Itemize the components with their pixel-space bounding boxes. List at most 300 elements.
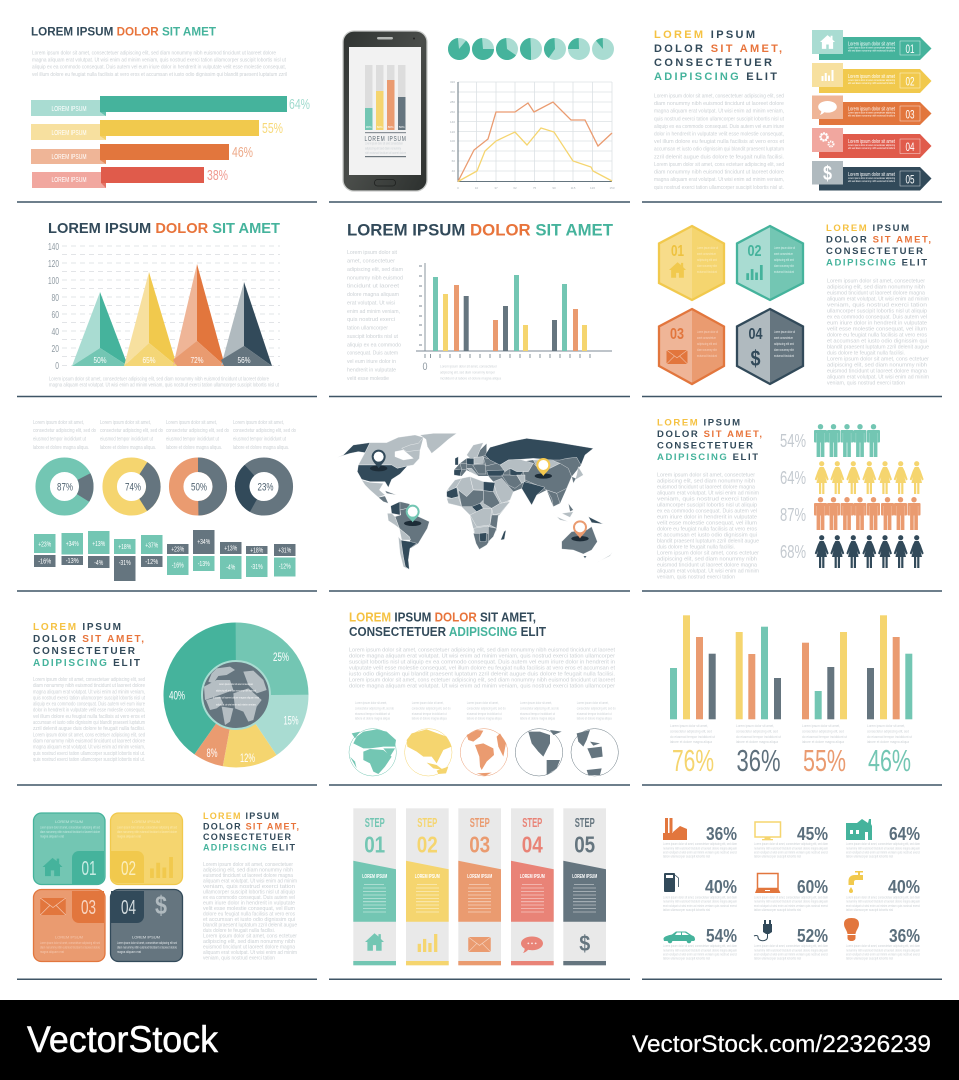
chart: donut 74%: 74%: [125, 482, 141, 494]
chart: delta boxes: -4%: [94, 560, 103, 567]
captions: bar groups: labore et dolore magna aliqua: [802, 740, 844, 744]
chart: line chart: [450, 80, 615, 190]
stat: tap: tation ullamcorper suscipit lobortis nisl: [846, 908, 893, 912]
chart caption: Lorem ipsum dolor sit amet, consectetuer: [440, 364, 498, 368]
bar: 38%: LOREM IPSUM: [52, 177, 87, 184]
panel: four bar groups: [670, 615, 912, 778]
text block: grouped bars: vel eum iriure dolor in: [347, 359, 396, 365]
text block: pie: dolor in hendrerit in vulputate velit esse molestie consequat,: [33, 708, 145, 714]
card 01: magna aliquam erat: [40, 834, 64, 838]
text block: four columns: labore et dolore magna aliqua.: [233, 445, 289, 451]
heading: arrow list: ADIPISCING ELIT: [654, 71, 777, 83]
text block: cards: veniam, quis nostrud exerci tation: [203, 884, 295, 890]
panel: icon statistics: [663, 818, 920, 961]
step 01: LOREM IPSUM: [362, 874, 387, 880]
text block: globes: suscipit lobortis nisl ut aliquip ex ea commodo consequat. Duis autem vel eum iriure dolor in hendrerit in: [349, 660, 615, 666]
hexagon 03: euismod tincidunt: [697, 354, 717, 358]
chart: line chart: 153: [609, 186, 615, 190]
arrow item 05: $: [823, 163, 832, 185]
card 04: [110, 890, 182, 962]
arrow item 05: Lorem ipsum dolor sit amet consectetuer adipiscing: [848, 176, 895, 180]
text block: four columns: labore et dolore magna aliqua.: [33, 445, 89, 451]
captions: globes: [355, 701, 616, 720]
text block: four columns: eiusmod tempor incididunt ut: [100, 436, 153, 442]
text block: cards: adipiscing elit, sed diam nonummy nibh: [203, 939, 295, 945]
card 04: $: [155, 890, 167, 920]
chart: delta boxes: -13%: [198, 561, 210, 568]
hexagon 02: Lorem ipsum dolor sit: [774, 246, 795, 250]
captions: bar groups: Lorem ipsum dolor sit amet,: [867, 724, 905, 728]
arrow item 02: [812, 63, 932, 93]
panel: phone and charts: [343, 31, 615, 191]
hexagon 03: Lorem ipsum dolor sit: [697, 330, 718, 334]
icon: teal globe: [349, 729, 396, 776]
text block: pie: magna aliquam erat volutpat. Ut wisi enim ad minim veniam,: [33, 745, 145, 751]
card 01: LOREM IPSUM: [55, 819, 83, 824]
globe in pie centre: tincidunt ut laoreet dolore magna aliquam erat: [213, 696, 259, 700]
icon: smartphone: 30%: [366, 125, 372, 129]
chart: delta boxes: -31%: [119, 560, 131, 567]
percent labels: people: 54%: [780, 431, 806, 451]
chart: donut 23%: 23%: [258, 482, 274, 494]
chart: donut 87%: 87%: [57, 482, 73, 494]
card 04: 04: [121, 897, 136, 919]
arrow item 02: elit sed diam nonummy nibh euismod tincidunt: [848, 81, 895, 85]
text block: cards: euismod tincidunt ut laoreet dolore magna: [203, 873, 293, 879]
percent labels: people: [780, 431, 806, 562]
text block: arrow list body: magna aliquam erat volutpat. Ut wisi enim ad minim veniam,: [654, 109, 784, 115]
text block: hexagons: Lorem ipsum dolor sit amet, cons ectetuer: [827, 356, 929, 362]
heading: cards: [203, 811, 299, 852]
stat: laptop: 60%: [797, 877, 828, 897]
heading: globes: LOREM IPSUM DOLOR SIT AMET,: [349, 610, 536, 624]
hexagon 01: euismod tincidunt: [697, 270, 717, 274]
chart: delta boxes: +34%: [66, 541, 79, 548]
text block: people: euismod tincidunt ut laoreet dolore magna: [657, 562, 757, 568]
text block: hexagons: Lorem ipsum dolor sit amet, consectetuer: [827, 278, 925, 284]
arrow item 04: elit sed diam nonummy nibh euismod tincidunt: [848, 146, 895, 150]
panel: people percentages: [657, 418, 924, 580]
hexagon 03: diam nonummy nibh: [697, 348, 717, 352]
text block: hexagons: aliquam erat volutpat. Ut wisi enim ad minim: [827, 296, 929, 302]
icon: smartphone: [343, 31, 427, 191]
bar: 46%: 46%: [232, 145, 253, 161]
panel: triangle chart: [48, 220, 280, 388]
captions: bar groups: do eiusmod tempor incididunt ut: [736, 735, 781, 739]
text block: cards: Lorem ipsum dolor sit amet, cons ectetuer: [203, 934, 297, 940]
panel: horizontal bars: [31, 24, 310, 188]
hexagon 01: [659, 226, 724, 300]
card 04: diam nonummy nibh euismod tincidunt ut laoreet dolore: [117, 946, 177, 950]
stat: bulb: [844, 918, 920, 961]
panel: hexagons: [659, 223, 931, 386]
chart: line chart: 60: [452, 159, 455, 163]
card 02: LOREM IPSUM: [132, 819, 160, 824]
chart: delta boxes: -12%: [145, 559, 158, 566]
step 03: LOREM IPSUM: [467, 874, 492, 880]
chart: delta boxes: -16%: [172, 562, 184, 570]
captions: globes: eiusmod tempor incididunt ut: [412, 712, 447, 716]
heading: globes: [349, 610, 546, 639]
hexagon 03: [659, 309, 724, 384]
stat: car: tation ullamcorper suscipit lobortis nisl: [663, 957, 710, 961]
people row: teal men: [814, 424, 880, 457]
chart: pyramid 56%: [221, 282, 272, 366]
icon: smartphone: 80%: [388, 125, 394, 129]
text block: people: velit esse molestie consequat, vel illum: [657, 520, 757, 526]
hexagon 02: diam nonummy nibh: [774, 264, 794, 268]
stat: car: Lorem ipsum dolor sit amet, consectetuer adipiscing elit, sed diam: [663, 944, 737, 948]
captions: globes: labore et dolore magna aliqua: [467, 716, 502, 720]
captions: globes: labore et dolore magna aliqua: [577, 716, 612, 720]
panel: donuts and deltas: [33, 420, 296, 581]
step 04: [511, 808, 554, 965]
text block: cards: euismod tincidunt ut laoreet dolore magna: [203, 944, 295, 950]
step 05: LOREM IPSUM: [572, 874, 597, 880]
heading: arrow list: CONSECTETUER: [654, 57, 772, 69]
globe in pie centre: volutpat ut wisi enim ad minim veniam: [216, 702, 257, 706]
captions: bar groups: Lorem ipsum dolor sit amet,: [670, 724, 708, 728]
icon: smartphone: Lorem ipsum dolor sit amet consectetuer: [365, 142, 404, 146]
hexagon 01: Lorem ipsum dolor sit: [697, 246, 718, 250]
icon: smartphone: adipiscing elit sed diam nonummy: [365, 146, 401, 150]
text block: arrow list body: quis nostrud exerci tation ullamcorper suscipit lobortis nisl ut.: [654, 185, 784, 191]
text block: cards: Lorem ipsum dolor sit amet, consectetuer: [203, 862, 293, 868]
heading: pie: [33, 622, 144, 669]
stat: fuel pump: [663, 873, 737, 912]
text block: people: aliquam erat volutpat. Ut wisi enim ad minim: [657, 490, 759, 496]
captions: globes: eiusmod tempor incididunt ut: [577, 712, 612, 716]
text block: arrow list body: accumsan et iusto odio dignissim qui blandit praesent luptatum: [654, 147, 784, 153]
text block: hexagons: veniam, quis nostrud exerci tation: [827, 302, 927, 308]
chart: pyramid 56%: 56%: [238, 356, 250, 365]
card 01: Lorem ipsum dolor sit amet, consectetuer adipiscing elit sed: [40, 826, 100, 830]
stat: laptop: erat volutpat ut wisi enim ad minim veniam quis nostrud exerci: [754, 904, 828, 908]
icon: orange globe: [460, 729, 508, 776]
chart caption: [440, 364, 501, 380]
text block: grouped bars: enim ad minim veniam,: [347, 309, 400, 315]
text block: hexagons: veniam, quis nostrud exerci tation: [827, 380, 905, 386]
arrow item 04: [812, 128, 932, 158]
card 02: 02: [121, 858, 136, 880]
step 05: [563, 808, 606, 965]
text block: pie: Lorem ipsum dolor sit amet, consectetuer adipiscing elit, sed: [33, 677, 145, 683]
bar: 55%: 55%: [262, 121, 283, 137]
text block: arrow list body: diam nonummy nibh euismod tincidunt ut laoreet dolore: [654, 101, 784, 107]
heading: cards: CONSECTETUER: [203, 832, 292, 842]
chart: line chart: 320: [450, 80, 455, 84]
heading: people: CONSECTETUER: [657, 440, 753, 452]
axis labels: 140: [48, 242, 59, 253]
chart: line chart: 62: [513, 186, 517, 190]
arrow item 02: 02: [906, 74, 915, 88]
chart: delta boxes: +23%: [38, 542, 51, 548]
heading: hexagons: ADIPISCING ELIT: [826, 258, 927, 268]
arrow item 01: elit sed diam nonummy nibh euismod tincidunt: [848, 48, 895, 52]
percent labels: bar groups: 36%: [736, 744, 780, 778]
heading: people: DOLOR SIT AMET,: [657, 429, 762, 440]
card 03: diam nonummy nibh euismod tincidunt ut laoreet dolore: [40, 946, 100, 950]
text block: globes: [349, 648, 616, 690]
text block: people: blandit praesent luptatum zzril delenit augue: [657, 538, 759, 544]
bar: 38%: [32, 167, 228, 188]
stat: fuel pump: Lorem ipsum dolor sit amet, consectetuer adipiscing elit, sed diam: [663, 895, 737, 899]
arrow item 03: Lorem ipsum dolor sit amet: [848, 106, 895, 112]
text block: cards: adipiscing elit, sed diam nonummy nibh: [203, 868, 293, 874]
text block: grouped bars: velit esse molestie: [347, 376, 389, 382]
stat: house: 64%: [889, 824, 920, 844]
arrow item 05: elit sed diam nonummy nibh euismod tincidunt: [848, 179, 895, 183]
wordmark: VectorStock: [27, 1019, 218, 1060]
percent labels: people: 87%: [780, 505, 806, 525]
chart: line chart: 0: [457, 186, 459, 190]
card 03: [34, 890, 105, 962]
panel: world map: [337, 433, 613, 570]
text block: pie: quis nostrud exerci tation ullamcorper suscipit lobortis nisl ut.: [33, 751, 145, 757]
text block: grouped bars: tation ullamcorper: [347, 326, 388, 332]
text block: people: euismod tincidunt ut laoreet dolore magna: [657, 484, 755, 490]
hexagon 04: amet consectetuer: [774, 336, 794, 340]
text block: hexagons: adipiscing elit, sed diam nonummy nibh: [827, 284, 925, 290]
people row: yellow women: [815, 461, 924, 494]
stat: house: nonummy nibh euismod tincidunt ut laoreet dolore magna aliquam: [846, 846, 920, 850]
text block: people: duis dolore te feugait nulla facilisi.: [657, 544, 735, 550]
stat: tap: Lorem ipsum dolor sit amet, consectetuer adipiscing elit, sed diam: [846, 895, 920, 899]
chart: line chart: 40: [452, 169, 455, 173]
heading: arrow list: DOLOR SIT AMET,: [654, 43, 782, 55]
card 03: LOREM IPSUM: [55, 934, 83, 940]
text block: hexagons: dolore eu feugiat nulla facilisis at vero eros: [827, 332, 928, 338]
image reference: VectorStock.com/22326239: [632, 1031, 931, 1058]
captions: bar groups: consectetur adipiscing elit, sed: [802, 730, 844, 734]
stat: car: [663, 926, 737, 961]
hexagon 03: 03: [670, 326, 684, 343]
text block: arrow list body: quis nostrud exerci tation ullamcorper suscipit lobortis nisl ut: [654, 116, 785, 122]
stat: monitor: erat volutpat ut wisi enim ad minim veniam quis nostrud exerci: [754, 851, 828, 855]
text block: pie: magna aliquam erat volutpat. Ut wisi enim ad minim veniam,: [33, 689, 145, 695]
chart: donut 50%: 50%: [191, 482, 207, 494]
icon: gears: [820, 134, 834, 146]
text block: pie: zzril delenit augue duis dolore te feugait nulla facilisi.: [33, 726, 145, 732]
chart: row of seven pies: [448, 38, 614, 60]
text block: people: veniam, quis nostrud exerci tation: [657, 574, 735, 580]
chart: donut 50%: [176, 465, 220, 508]
step 02: 02: [417, 832, 438, 858]
captions: globes: Lorem ipsum dolor sit amet,: [355, 701, 387, 705]
captions: globes: labore et dolore magna aliqua: [520, 716, 555, 720]
hexagon 04: $: [750, 346, 760, 371]
stat: bulb: tation ullamcorper suscipit lobortis nisl: [846, 957, 893, 961]
text block: grouped bars: Lorem ipsum dolor sit: [347, 250, 398, 256]
card 02: Lorem ipsum dolor sit amet, consectetuer adipiscing elit sed: [117, 826, 177, 830]
captions: bar groups: labore et dolore magna aliqua: [867, 740, 909, 744]
text block: grouped bars: amet, consectetuer: [347, 258, 395, 264]
arrow item 03: 03: [906, 108, 915, 122]
captions: bar groups: [670, 724, 912, 744]
captions: bar groups: consectetur adipiscing elit, sed: [867, 730, 909, 734]
captions: globes: eiusmod tempor incididunt ut: [355, 712, 390, 716]
chart: bar group 55%: [802, 632, 847, 719]
text block: cards: velit esse molestie consequat, vel illum: [203, 906, 295, 912]
text block: arrow list body: [654, 94, 785, 191]
stat: monitor: [754, 822, 828, 859]
text block: four columns: consectetur adipiscing elit, sed do: [100, 428, 163, 434]
panel: grouped bar chart: [347, 220, 614, 382]
text block: grouped bars: adipiscing elit, sed diam: [347, 267, 403, 273]
heading: grouped bars: LOREM IPSUM DOLOR SIT AMET: [347, 220, 614, 240]
text block: hexagons: [827, 278, 929, 386]
text block: cards: aliquam erat volutpat. Ut wisi enim ad minim: [203, 878, 297, 884]
text block: hexagons: eum iriure dolor in hendrerit in vulputate: [827, 320, 927, 326]
pie labels: 40%: [169, 690, 185, 702]
chart: line chart: 90: [552, 186, 556, 190]
hexagon 02: euismod tincidunt: [774, 270, 794, 274]
captions: bar groups: Lorem ipsum dolor sit amet,: [802, 724, 840, 728]
text block: grouped bars: dolore magna aliquam: [347, 292, 399, 298]
text block: cards: eum iriure dolor in hendrerit in vulputate: [203, 900, 295, 906]
stat: factory: Lorem ipsum dolor sit amet, consectetuer adipiscing elit, sed diam: [663, 842, 737, 846]
stat: fuel pump: nonummy nibh euismod tincidunt ut laoreet dolore magna aliquam: [663, 900, 737, 904]
text block: arrow list body: Lorem ipsum dolor sit amet, consectetuer adipiscing elit, sed: [654, 94, 784, 100]
stat: car: 54%: [706, 926, 737, 946]
chart: delta boxes: -16%: [38, 558, 51, 566]
stat: plug: Lorem ipsum dolor sit amet, consectetuer adipiscing elit, sed diam: [754, 944, 828, 948]
percent labels: bar groups: 76%: [672, 744, 714, 778]
captions: bar groups: consectetur adipiscing elit, sed: [670, 730, 712, 734]
chart: pyramid 50%: [72, 292, 128, 366]
chart: segmented pie: [162, 621, 310, 769]
captions: bar groups: do eiusmod tempor incididunt ut: [802, 735, 847, 739]
arrow item 03: [812, 96, 932, 125]
stat: tap: 40%: [888, 877, 920, 897]
chart: line chart: 80: [452, 149, 455, 153]
chart: bar group 46%: [867, 615, 912, 719]
text block: four columns: eiusmod tempor incididunt ut: [33, 436, 86, 442]
stat: laptop: Lorem ipsum dolor sit amet, consectetuer adipiscing elit, sed diam: [754, 895, 828, 899]
panel: steps: [353, 808, 606, 965]
captions: bar groups: consectetur adipiscing elit, sed: [736, 730, 778, 734]
text block: globes: vulputate velit esse molestie consequat, vel illum dolore eu feugiat nulla facilisis at vero eros et accumsan et: [349, 666, 616, 672]
card 04: LOREM IPSUM: [132, 934, 160, 940]
text block: four columns: consectetur adipiscing elit, sed do: [33, 428, 96, 434]
stat: car: erat volutpat ut wisi enim ad minim veniam quis nostrud exerci: [663, 953, 737, 957]
text block: grouped bars: nonummy nibh euismod: [347, 275, 403, 281]
chart: delta boxes: -12%: [279, 564, 291, 570]
captions: bar groups: Lorem ipsum dolor sit amet,: [736, 724, 774, 728]
hexagon 03: adipiscing elit sed: [697, 342, 717, 346]
text block: four columns: eiusmod tempor incididunt ut: [166, 436, 219, 442]
chart: delta boxes: [34, 530, 296, 581]
arrow item 05: Lorem ipsum dolor sit amet: [848, 172, 895, 178]
text block: cards: ullamcorper suscipit lobortis nisl ut aliquip: [203, 890, 295, 896]
card 01: 01: [82, 858, 96, 880]
globe in pie centre: Lorem ipsum dolor sit amet consectetuer: [219, 682, 253, 686]
hexagon 02: [737, 226, 803, 300]
text block: bars intro: [32, 50, 287, 78]
stat: tap: erat volutpat ut wisi enim ad minim veniam quis nostrud exerci: [846, 904, 920, 908]
step 04: STEP: [522, 815, 542, 830]
arrow item 03: Lorem ipsum dolor sit amet consectetuer adipiscing: [848, 110, 895, 114]
stat: house: tation ullamcorper suscipit lobortis nisl: [846, 855, 893, 859]
stat: bulb: Lorem ipsum dolor sit amet, consectetuer adipiscing elit, sed diam: [846, 944, 920, 948]
stat: bulb: nonummy nibh euismod tincidunt ut laoreet dolore magna aliquam: [846, 948, 920, 952]
text block: arrow list body: Lorem ipsum dolor sit amet, cons ectetuer adipiscing elit, sed: [654, 162, 784, 168]
text block: grouped bars: hendrerit in vulputate: [347, 368, 396, 374]
arrow item 01: Lorem ipsum dolor sit amet consectetuer adipiscing: [848, 46, 895, 50]
pie labels: 8%: [206, 748, 218, 760]
text block: cards: veniam, quis nostrud exerci tation: [203, 956, 275, 962]
heading: bars: LOREM IPSUM DOLOR SIT AMET: [31, 24, 217, 38]
card 01: diam nonummy nibh euismod tincidunt ut laoreet dolore: [40, 830, 100, 834]
captions: globes: Lorem ipsum dolor sit amet,: [467, 701, 499, 705]
card 03: Lorem ipsum dolor sit amet, consectetuer adipiscing elit sed: [40, 941, 100, 945]
pin: South America: [404, 505, 421, 526]
axis labels: 20: [52, 344, 59, 355]
text block: globes: Lorem ipsum dolor sit amet, cons ectetuer adipiscing elit, sed diam nonummy nibh euismod tincidunt ut laoreet: [349, 678, 616, 684]
captions: bar groups: labore et dolore magna aliqua: [670, 740, 712, 744]
chart: pyramid 72%: 72%: [190, 356, 204, 365]
text block: grouped bars: tincidunt ut laoreet: [347, 284, 400, 290]
text block: bars intro: Lorem ipsum dolor sit amet, consectetuer adipiscing elit, sed diam nonummy nibh euismod tincidunt ut laoreet dolore: [32, 50, 276, 56]
bar: 46%: [31, 144, 253, 164]
text block: people: dolore eu feugiat nulla facilisis at vero eros: [657, 526, 758, 532]
step 05: STEP: [575, 815, 595, 830]
text block: bars intro: aliquip ex ea commodo consequat. Duis autem vel eum iriure dolor in hendrerit in vulputate velit esse molestie consequat,: [32, 65, 286, 71]
arrow item 02: Lorem ipsum dolor sit amet consectetuer adipiscing: [848, 78, 895, 82]
text block: globes: Lorem ipsum dolor sit amet, consectetuer adipiscing elit, sed diam nonummy nibh euismod tincidunt ut laoreet: [349, 648, 616, 654]
step 01: STEP: [365, 815, 385, 830]
chart: delta boxes: +13%: [224, 546, 237, 552]
stat: fuel pump: erat volutpat ut wisi enim ad minim veniam quis nostrud exerci: [663, 904, 737, 908]
card 02: [110, 813, 182, 884]
text block: four columns: Lorem ipsum dolor sit amet,: [33, 420, 84, 426]
text block: people: aliquam erat volutpat. Ut wisi enim ad minim: [657, 568, 759, 574]
card 01: [34, 813, 105, 884]
chart: pyramid 72%: [173, 264, 225, 366]
hexagon 02: adipiscing elit sed: [774, 258, 794, 262]
text block: arrow list body: dolor in hendrerit in vulputate velit esse molestie consequat,: [654, 132, 784, 138]
captions: bar groups: labore et dolore magna aliqua: [736, 740, 778, 744]
card 03: magna aliquam erat: [40, 950, 64, 954]
stat: monitor: Lorem ipsum dolor sit amet, consectetuer adipiscing elit, sed diam: [754, 842, 828, 846]
text block: grouped bars: consequat. Duis autem: [347, 351, 398, 357]
captions: globes: Lorem ipsum dolor sit amet,: [520, 701, 552, 705]
heading: pie: LOREM IPSUM: [33, 622, 121, 633]
chart: pyramid 50%: 50%: [94, 356, 106, 365]
hexagon 04: [737, 309, 803, 384]
text block: people: adipiscing elit, sed diam nonummy nibh: [657, 478, 755, 484]
chart: delta boxes: +18%: [118, 544, 131, 551]
bar: 64%: [31, 96, 310, 116]
text block: hexagons: aliquam erat volutpat. Ut wisi enim ad minim: [827, 374, 929, 380]
chart: delta boxes: +37%: [145, 542, 158, 550]
text block: hexagons: duis dolore te feugait nulla facilisi.: [827, 350, 905, 356]
axis zero: 0: [422, 361, 428, 373]
percent labels: bar groups: [672, 744, 911, 778]
hexagon 04: euismod tincidunt: [774, 354, 794, 358]
icon: smartphone: 60%: [377, 125, 383, 129]
text block: cards: aliquam erat volutpat. Ut wisi enim ad minim: [203, 950, 297, 956]
stat: bulb: 36%: [889, 926, 920, 946]
text block: pie: vel illum dolore eu feugiat nulla facilisis at vero eros et: [33, 714, 146, 720]
text block: people: ullamcorper suscipit lobortis nisl ut aliquip: [657, 502, 757, 508]
stat: house: [846, 819, 920, 859]
chart: line chart: 280: [450, 100, 455, 104]
text block: grouped bars: quis nostrud exerci: [347, 317, 395, 323]
stat: laptop: tation ullamcorper suscipit lobortis nisl: [754, 908, 801, 912]
axis labels: 60: [52, 310, 59, 321]
card 03: 03: [81, 897, 96, 919]
